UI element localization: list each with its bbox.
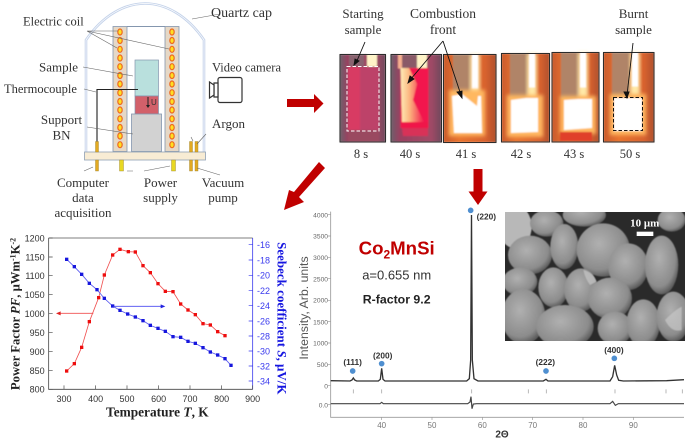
bottom axis labels [56,394,260,404]
SEM micrograph [505,212,685,341]
right axis labels: -30 [257,346,270,356]
label: combustion front: Combustion [410,6,476,21]
right axis title: Seebeck coefficient S , μV/K [275,242,290,395]
support BN [132,114,162,152]
left axis labels: 850 [30,366,45,376]
label: computer data acquisition: data [72,190,94,205]
right coil column [165,26,179,152]
left coil turns [118,29,122,148]
label: quartz cap: Quartz cap [211,6,272,21]
sample unburnt [135,60,158,96]
right axis labels: -24 [257,301,270,311]
label: power supply: supply [143,190,178,205]
right axis labels: -20 [257,271,270,281]
time labels [354,147,640,161]
label: video camera: Video camera [212,60,281,74]
frame: 43 s [552,52,599,142]
bottom axis title: Temperature T, K [106,404,209,419]
diffraction trace [331,215,684,381]
left axis title: K [8,244,22,254]
quartz cap [86,4,204,152]
blue series [65,258,233,367]
axis ticks [49,238,253,389]
y axis title: Intensity, Arb. units [297,256,311,360]
label: support BN: Support [41,112,82,127]
bottom axis labels: 500 [119,394,134,404]
plot frame [331,212,684,417]
left axis labels: 900 [30,347,45,357]
right axis labels: -32 [257,361,270,371]
grain detail [583,270,682,331]
right axis labels: -16 [257,240,270,250]
left axis title: -1 [8,254,17,261]
panel: combustion frames [340,6,654,161]
bottom axis labels: 900 [245,394,260,404]
label: argon: Argon [212,116,245,131]
y axis labels: 4000 [313,212,328,219]
right coil turns [170,29,174,148]
x axis labels [377,421,638,430]
connectors [96,142,198,171]
x axis labels: 40 [377,421,387,430]
pointers [354,41,633,98]
label: vacuum pump: Vacuum [202,175,244,190]
y axis labels: 0 [324,383,328,390]
left coil column [113,26,127,152]
left axis labels: 950 [30,328,45,338]
chart: XRD pattern [297,207,684,441]
bottom axis labels: 800 [214,394,229,404]
chart: power factor and Seebeck coefficient [8,233,290,419]
x axis labels: 50 [428,421,437,430]
scale bar [637,232,653,236]
y axis labels: 0.0 [319,402,328,409]
bottom axis labels: 300 [56,394,71,404]
peak labels: (220) [477,211,496,221]
time labels: 41 s [456,147,476,161]
red series [65,248,227,373]
label: burnt sample: sample [615,22,652,37]
time labels: 42 s [511,147,531,161]
label: starting sample: sample [345,22,382,37]
label: computer data acquisition: Computer [57,175,110,190]
peak labels: (222) [536,357,555,367]
arrow: frames to power factor chart [284,162,325,210]
right axis labels [257,240,270,386]
bottom axis labels: 600 [151,394,166,404]
arrow: frames to XRD chart [468,169,488,205]
right axis labels: -28 [257,331,270,341]
y axis labels: 500 [317,362,328,369]
label: burnt sample: Burnt [619,6,649,21]
arrow: schematic to frames [287,94,324,113]
Bragg position ticks [353,389,682,393]
peak markers [350,207,617,374]
velocity arrow: U [151,98,157,107]
label: support BN: BN [52,128,71,142]
y axis ticks [328,215,331,405]
label: power supply: Power [144,175,178,190]
y axis labels: 1500 [313,319,328,326]
label: computer data acquisition: acquisition [54,205,112,220]
left axis labels: 1200 [25,233,45,243]
peak labels: (400) [604,345,624,355]
right axis labels: -26 [257,316,270,326]
base plate [84,152,206,160]
x axis labels: 90 [629,421,638,430]
frame: 40 s [391,54,442,142]
x axis labels: 60 [478,421,487,430]
y axis labels: 2500 [313,276,328,283]
grains [505,212,685,341]
R-factor: R-factor 9.2 [363,293,431,307]
x axis labels: 80 [579,421,588,430]
sample burning [135,96,158,114]
left axis labels: 1000 [25,309,45,319]
label: vacuum pump: pump [208,190,238,205]
y axis labels: 3500 [313,234,328,241]
peak labels: (111) [343,357,362,367]
thermocouple [97,90,138,142]
coil top bar [127,26,165,28]
left axis title: -2 [8,238,17,245]
right axis labels: -34 [257,376,270,386]
peak labels [343,211,624,367]
y axis labels: 2000 [313,298,328,305]
right axis labels: -18 [257,255,270,265]
x axis title: 2Θ [495,430,509,441]
y axis labels: 1000 [313,341,328,348]
x axis labels: 70 [528,421,538,430]
left axis labels: 1050 [25,290,45,300]
left axis labels: 1150 [25,252,45,262]
compound formula: MnSi [390,237,435,258]
frame: 8 s [340,54,386,142]
y axis labels [313,212,328,409]
left axis labels: 1100 [25,271,45,281]
panel: furnace schematic [4,4,281,220]
scale bar label: 10 μm [630,218,659,230]
compound formula: 2 [383,247,390,261]
velocity arrow [146,97,157,108]
label: sample: Sample [39,60,78,74]
residual trace [331,397,684,409]
label: starting sample: Starting [342,6,384,21]
time labels: 40 s [400,147,420,161]
compound formula: Co [359,237,383,258]
y axis labels: 3000 [313,255,328,262]
arrow: red series to left axis [56,311,93,315]
icon: video camera [210,78,242,102]
peak labels: (200) [373,351,393,361]
bottom axis labels: 700 [182,394,197,404]
x axis ticks [382,417,633,420]
label: electric coil: Electric coil [23,14,84,28]
lattice parameter: a=0.655 nm [362,267,431,282]
left axis labels: 800 [30,385,45,395]
time labels: 8 s [354,147,368,161]
plot frame [49,238,253,389]
label: combustion front: front [430,22,456,37]
frame: 42 s [502,54,550,142]
left axis title: Power Factor PF, μWm [8,261,22,390]
label: thermocouple: Thermocouple [4,82,77,96]
time labels: 43 s [564,147,584,161]
bottom axis labels: 400 [88,394,103,404]
left axis labels [25,233,45,395]
right axis labels: -22 [257,286,270,296]
arrow: blue series to right axis [113,304,165,308]
frame: 50 s [604,52,654,142]
leader lines [83,14,220,175]
time labels: 50 s [620,147,640,161]
frame: 41 s [444,54,496,142]
